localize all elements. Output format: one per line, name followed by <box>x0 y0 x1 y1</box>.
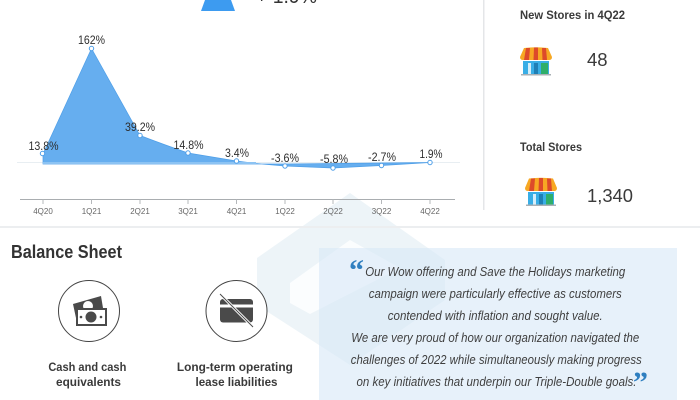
quote text: We are very proud of how our organization navigated the <box>351 331 639 345</box>
data labels: 14.8% <box>174 140 204 152</box>
heading: new stores: New Stores in 4Q22 <box>520 10 625 22</box>
icon: banknotes <box>58 280 120 342</box>
x axis: 2Q21 <box>130 207 150 216</box>
x axis: 2Q22 <box>323 207 343 216</box>
x axis: 4Q20 <box>33 207 53 216</box>
top growth indicator <box>201 0 317 11</box>
quote text: on key initiatives that underpin our Triple-Double goals. <box>356 375 636 389</box>
quote text: challenges of 2022 while simultaneously making progress <box>351 353 642 367</box>
area fill <box>43 48 430 168</box>
data labels: 162% <box>78 35 105 47</box>
label: long-term operating lease liabilities: lease liabilities <box>196 375 278 389</box>
value: new stores: 48 <box>587 49 608 70</box>
opening quote mark: “ <box>349 254 364 287</box>
quote text: contended with inflation and sought value. <box>388 309 603 323</box>
icon: up arrow <box>201 0 235 11</box>
x axis: 4Q21 <box>227 207 247 216</box>
x axis: 4Q22 <box>420 207 440 216</box>
panel: quote <box>319 248 677 400</box>
item: long-term operating lease liabilities <box>177 280 296 389</box>
heading: total stores: Total Stores <box>520 142 582 154</box>
icon: crossed-out card <box>206 280 267 342</box>
data points <box>40 46 432 170</box>
panel: total stores <box>520 142 633 206</box>
quote text: campaign were particularly effective as customers <box>369 287 622 301</box>
x axis: 1Q21 <box>82 207 102 216</box>
icon: storefront <box>520 47 552 76</box>
quote text: Our Wow offering and Save the Holidays marketing <box>365 265 625 279</box>
data labels: 39.2% <box>125 122 155 134</box>
item: cash and cash equivalents <box>48 280 130 389</box>
data labels: 13.8% <box>28 141 58 153</box>
label: long-term operating lease liabilities: Long-term operating <box>177 360 293 374</box>
data labels <box>28 35 442 166</box>
heading: balance sheet: Balance Sheet <box>11 242 122 262</box>
x axis: 3Q21 <box>178 207 198 216</box>
background watermark <box>257 193 445 365</box>
x axis <box>20 200 455 216</box>
label: cash and cash equivalents: Cash and cash <box>48 360 126 374</box>
data labels: -2.7% <box>368 152 396 164</box>
panel: new stores <box>520 10 625 76</box>
data labels: 3.4% <box>225 148 249 160</box>
value: total stores: 1,340 <box>587 185 633 206</box>
x axis: 1Q22 <box>275 207 295 216</box>
label: cash and cash equivalents: equivalents <box>56 375 121 389</box>
data labels: 1.9% <box>420 149 442 161</box>
area chart: comparable sales <box>17 35 460 216</box>
icon: storefront <box>525 178 557 206</box>
data labels: -3.6% <box>271 153 299 165</box>
closing quote mark: ” <box>633 366 648 399</box>
x axis: 3Q22 <box>372 207 392 216</box>
data labels: -5.8% <box>320 154 348 166</box>
